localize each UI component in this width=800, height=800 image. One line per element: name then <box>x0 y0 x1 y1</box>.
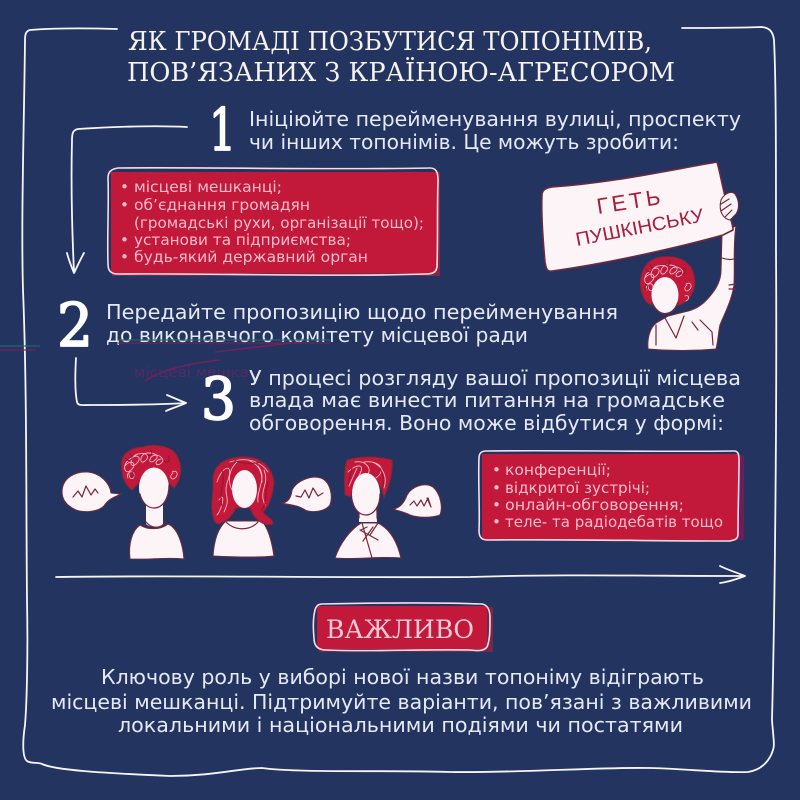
step 1 text <box>249 107 741 154</box>
hair <box>640 257 695 305</box>
list: discussion formats <box>492 461 723 531</box>
step 2 number: 2 <box>57 291 93 361</box>
list: who can initiate: будь-який державний орган <box>134 248 368 266</box>
step 1 number: 1 <box>209 96 236 164</box>
title: ЯК ГРОМАДІ ПОЗБУТИСЯ ТОПОНІМІВ, <box>128 26 652 57</box>
badge: important <box>313 603 493 652</box>
speech bubble 3 <box>393 485 441 517</box>
list: who can initiate: місцеві мешканці; <box>134 178 282 196</box>
list: who can initiate: • <box>120 231 129 249</box>
step 3 text <box>249 366 741 435</box>
step 1 text: чи інших топонімів. Це можуть зробити: <box>249 130 679 154</box>
list: who can initiate: • <box>120 248 129 266</box>
body and raised arm <box>648 226 736 350</box>
step 3 number: 3 <box>201 365 236 433</box>
list: discussion formats: відкритої зустрічі; <box>505 479 650 497</box>
panel: discussion formats <box>479 451 744 541</box>
list: discussion formats: теле- та радіодебатів тощо <box>505 513 723 531</box>
list: who can initiate: об’єднання громадян <box>134 196 310 214</box>
list: who can initiate: • <box>120 178 129 196</box>
step 2 text: до виконавчого комітету місцевої ради <box>106 323 528 347</box>
list: discussion formats: • <box>492 479 501 497</box>
long timeline arrow <box>56 566 745 583</box>
closing text: локальними і національними подіями чи постатями <box>118 713 683 737</box>
list: discussion formats: конференції; <box>505 461 611 479</box>
arrow: step 1 to step 2 <box>67 126 187 273</box>
speaker 1 <box>121 445 184 559</box>
speaker 3 <box>335 457 401 559</box>
list: discussion formats: • <box>492 513 501 531</box>
face <box>652 277 678 313</box>
step 3 text: У процесі розгляду вашої пропозиції місцева <box>249 366 741 390</box>
list: who can initiate: (громадські рухи, організації тощо); <box>134 214 424 232</box>
sign text line 1: ГЕТЬ <box>595 184 662 219</box>
illustration: three speakers <box>62 445 441 559</box>
step 1 text: Ініціюйте перейменування вулиці, проспекту <box>249 107 741 131</box>
step 3 text: влада має винести питання на громадське <box>249 388 725 412</box>
title: ПОВ’ЯЗАНИХ З КРАЇНОЮ-АГРЕСОРОМ <box>127 57 675 88</box>
arrow: step 2 to step 3 <box>75 358 186 411</box>
speaker 2 <box>212 457 274 557</box>
list: discussion formats: • <box>492 496 501 514</box>
title <box>127 26 675 88</box>
badge label: ВАЖЛИВО <box>326 615 474 644</box>
closing text <box>51 665 752 737</box>
list: who can initiate: установи та підприємства; <box>134 231 351 249</box>
sign text line 2: ПУШКІНСЬКУ <box>574 205 707 251</box>
speech bubble 1 <box>62 472 121 512</box>
list: who can initiate: • <box>120 196 129 214</box>
hand <box>720 192 739 220</box>
rendering artefacts behind step 3 <box>0 340 330 381</box>
panel: who can initiate <box>108 168 440 276</box>
list: discussion formats: онлайн-обговорення; <box>505 496 684 514</box>
closing text: місцеві мешканці. Підтримуйте варіанти, пов’язані з важливими <box>51 690 752 714</box>
illustration: person with protest sign <box>542 162 739 350</box>
step 2 text <box>106 300 618 347</box>
speech bubble 2 <box>281 477 331 512</box>
closing text: Ключову роль у виборі нової назви топоніму відіграють <box>101 665 704 689</box>
step 2 text: Передайте пропозицію щодо перейменування <box>106 300 618 324</box>
protest sign <box>542 162 733 271</box>
rendering artefacts behind step 3: місцеві мешка <box>134 365 249 381</box>
list: who can initiate <box>120 178 424 266</box>
list: discussion formats: • <box>492 461 501 479</box>
step 3 text: обговорення. Воно може відбутися у формі: <box>249 411 724 435</box>
